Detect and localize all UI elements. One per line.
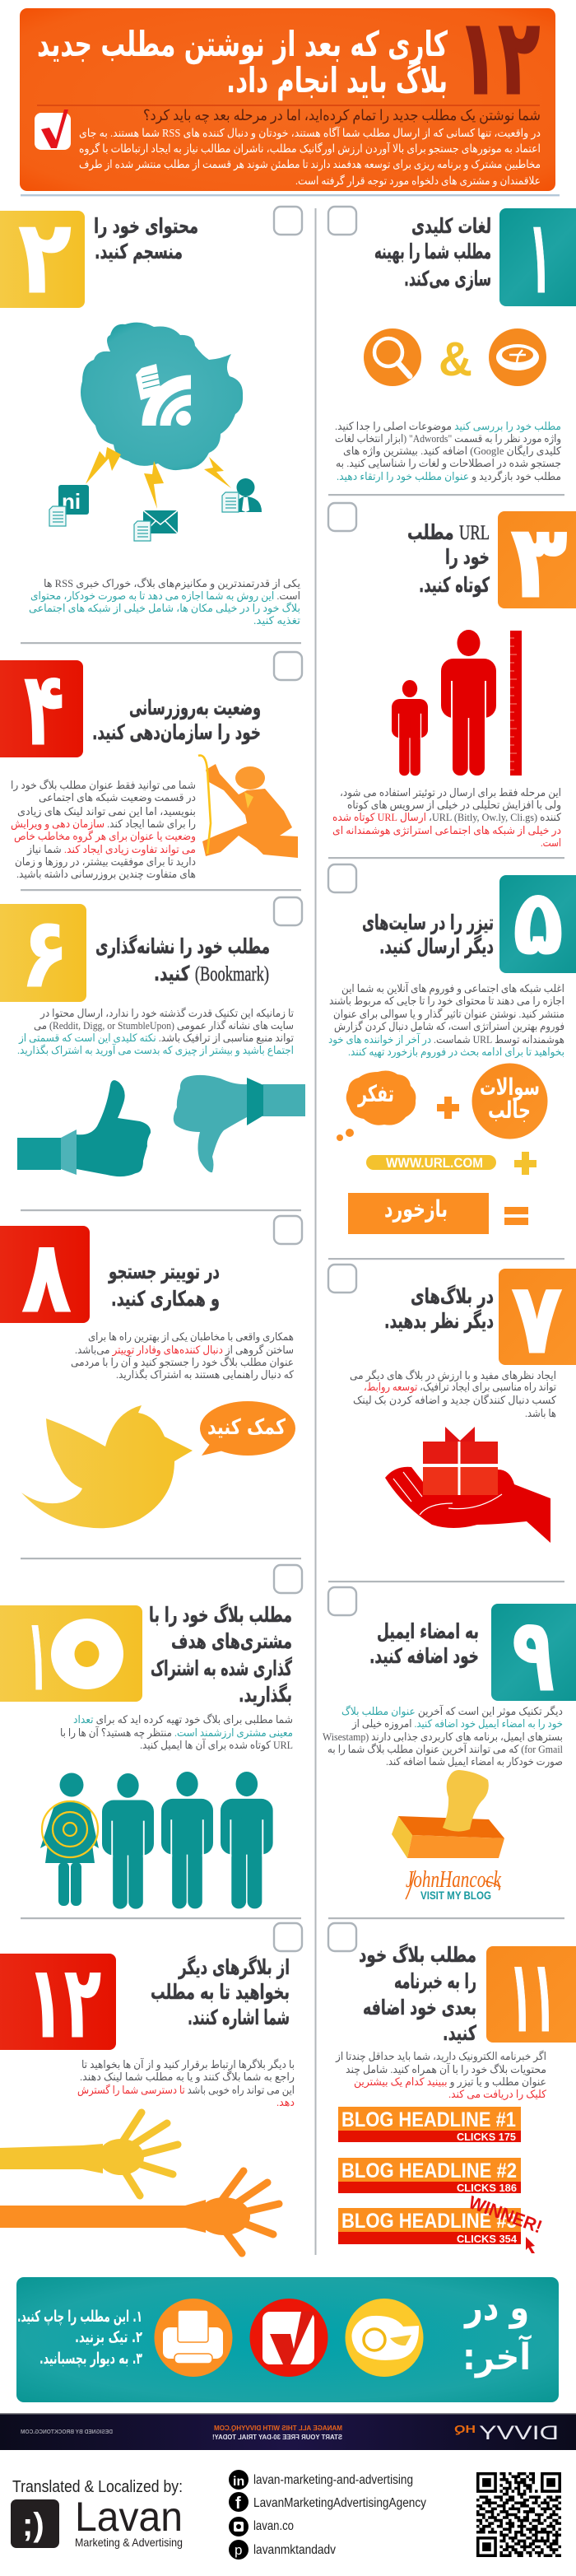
heading: بخواهید تا به مطلب <box>151 1980 290 2005</box>
facebook <box>229 2492 426 2513</box>
text block: هوشمندانه توسط URL شماست. در آخر از خواننده های خود <box>328 1032 564 1046</box>
checkbox <box>274 1565 302 1593</box>
text block: دیگر تکنیک موثر این است که آخرین عنوان مطلب بلاگ <box>341 1704 563 1718</box>
heading <box>369 1619 479 1669</box>
illustration: yellow hand <box>0 2113 178 2196</box>
text block: یکی از قدرتمندترین و مکانیزم‌های بلاگ، خوراک خبری RSS ها <box>44 576 300 590</box>
text block: بخواهید تا برای ادامه بحث در فوروم بازخورد تهیه کنند. <box>348 1046 564 1059</box>
pinterest: p <box>235 2542 242 2558</box>
text block <box>323 1704 563 1768</box>
text block: مطلب خود بازگردید و عنوان مطلب خود را ارتقاء دهید. <box>337 470 561 483</box>
badge: number 12: ۱۲ <box>27 1944 101 2061</box>
text block <box>11 778 196 881</box>
text block: کلیدی رایگان Google) اضافه کنید. بیشترین واژه های <box>343 445 562 458</box>
text block <box>332 786 562 849</box>
blog headline 3 winner: CLICKS 354 <box>457 2233 518 2245</box>
linkedin: lavan-marketing-and-advertising <box>253 2473 413 2487</box>
text block: است. <box>541 836 561 849</box>
heading <box>151 1955 290 2029</box>
illustration: gift in hand <box>385 1427 550 1543</box>
text block: مطلب خود را بررسی کنید موضوعات اصلی را جدا کنید. <box>335 420 561 433</box>
heading: مطلب بلاگ خود <box>359 1943 476 1968</box>
panel: step 1 keywords <box>328 198 576 483</box>
illustration: stamp <box>392 1770 504 1858</box>
badge: number 2: ۲ <box>18 198 72 317</box>
checkbox <box>274 897 302 925</box>
heading: وضعیت به‌روزرسانی <box>129 696 261 720</box>
text block: دهد. <box>276 2096 295 2108</box>
illustration: feedback equation: سوالات <box>480 1074 540 1101</box>
text block: راجع به شما بلاگ کنند و یا به مطلب شما لینک دهند. <box>80 2070 295 2084</box>
speech bubble <box>200 1401 295 1456</box>
heading: خود اضافه کنید. <box>369 1644 479 1669</box>
footer: social links <box>229 2470 426 2560</box>
intro paragraph: علاقمندان و مشتری های دلخواه مورد توجه قرار گرفته است. <box>295 174 541 188</box>
footer: qr code <box>476 2474 561 2555</box>
heading: and finally: آخر: <box>462 2334 532 2378</box>
badge: number 8: ۸ <box>21 1218 72 1335</box>
footer bar: mirrored divvyhq banner <box>0 2413 576 2450</box>
heading: (Bookmark) کنید. <box>154 962 269 985</box>
heading <box>407 520 490 598</box>
checkbox <box>274 1923 302 1951</box>
text block: شما مطلبی برای بلاگ خود تهیه کرده اید که برای تعداد <box>73 1712 293 1726</box>
panel: step 2 syndicate content <box>0 198 302 627</box>
footer bar: mirrored divvyhq banner: MANAGE ALL THIS WITH DIVVYHQ.COM <box>214 2425 342 2432</box>
icon: tape <box>346 2299 423 2377</box>
header panel <box>20 0 555 191</box>
logo: john hancock visit my blog: JohnHancock <box>406 1867 501 1893</box>
blog headline 3 winner: WINNER! <box>466 2192 545 2238</box>
intro paragraph: در واقعیت، تنها کسانی که از ارسال مطلب شما آگاه هستند، خودتان و دنبال کننده های RSS شما هستند. به جای <box>79 126 541 140</box>
panel: step 3 shorten url <box>328 503 576 849</box>
text block: دارید تا برای موفقیت بیشتر، در روزها و زمان <box>15 855 196 869</box>
text block: در خیلی از شبکه های اجتماعی استراتژی هوشمندانه ای <box>332 824 561 837</box>
heading <box>95 934 270 985</box>
text block: سایت های نشانه گذار عمومی (Reddit, Digg, or StumbleUpon) می <box>34 1019 294 1032</box>
text block: URL کوتاه شده برای آن ها ایمیل کنید. <box>140 1738 293 1752</box>
heading: شما اشاره کنند. <box>188 2005 290 2029</box>
badge: number 4 <box>0 650 83 769</box>
intro question: شما نوشتن یک مطلب جدید را تمام کرده‌اید، اما در مرحله بعد چه باید کرد؟ <box>143 107 541 124</box>
heading: and finally: و در <box>463 2287 529 2329</box>
panel: step 6 bookmark <box>0 896 305 1176</box>
illustration: feedback equation: بازخورد <box>384 1195 448 1223</box>
footer bar: mirrored divvyhq banner: DESIGNED BY BROCKTONCG.COM <box>21 2429 113 2435</box>
text block: شما می توانید فقط عنوان مطلب بلاگ خود را <box>11 778 196 792</box>
text block: بلاگ خود را در خیلی مکان ها، شامل خیلی از شبکه های اجتماعی <box>29 601 300 615</box>
heading <box>362 911 494 959</box>
main title: بلاگ باید انجام داد. <box>226 60 448 101</box>
text block: تا زمانیکه این تکنیک قدرت گذشته خود را ندارد، ارسال محتوا در <box>39 1007 294 1020</box>
text block: کسب دنبال کنندگان جدید و اضافه کردن بک لینک <box>353 1394 557 1407</box>
badge: number 9: ۹ <box>512 1596 555 1715</box>
heading: از بلاگرهای دیگر <box>178 1955 290 1980</box>
logo: john hancock visit my blog: VISIT MY BLOG <box>420 1889 491 1902</box>
heading: دیگر ارسال کنید. <box>379 934 494 959</box>
text block <box>60 1712 293 1752</box>
heading: منسجم کنید. <box>95 240 183 263</box>
footer bar: mirrored divvyhq banner: HQ <box>454 2423 476 2435</box>
illustration: feedback equation: WWW.URL.COM <box>386 1155 483 1171</box>
text block: جستجو شده در اصطلاحات و لغات را شناسایی کنید. به <box>336 457 561 470</box>
heading <box>374 214 491 291</box>
panel: step 9 email signature <box>323 1587 576 1902</box>
footer bar: mirrored divvyhq banner: DIVVY <box>479 2422 559 2444</box>
footer: lavan logo block: Translated & Localized by: <box>12 2478 183 2496</box>
text block <box>335 2050 547 2101</box>
checkbox <box>274 1216 302 1244</box>
heading: مطلب شما را بهینه <box>374 240 491 264</box>
badge: number 7: ۷ <box>511 1262 563 1377</box>
heading: بعدی خود اضافه <box>363 1996 476 2020</box>
text block: کننده URL (Bitly, Ow.ly, Cli.gs)، ارسال URL کوتاه شده <box>332 811 562 824</box>
checklist text: ۱. این مطلب را چاپ کنید. <box>17 2308 142 2326</box>
heading: بگذارید. <box>239 1683 292 1707</box>
heading: لغات کلیدی <box>411 214 491 238</box>
text block: تواند راه مناسبی برای ایجاد ترافیک، توسعه روابط، <box>364 1381 556 1394</box>
panel: step 7 comment on blogs <box>328 1262 576 1543</box>
blog headline 2: BLOG HEADLINE #2 <box>341 2159 517 2182</box>
text block: اجتماع باشید و بیشتر از چیزی که بدست می آورید به اشتراک بگذارید. <box>17 1043 294 1057</box>
text block <box>29 576 300 627</box>
illustration: thumbs up and down <box>17 1075 305 1176</box>
text block: که دنبال راهنمایی هستند به اشتراک بگذارید. <box>116 1368 295 1381</box>
illustration: feedback equation: جالب <box>488 1097 531 1124</box>
illustration: feedback equation <box>337 1064 548 1234</box>
badge: number 5: ۵ <box>513 869 564 975</box>
heading: مشتری‌های هدف <box>171 1629 292 1654</box>
text block <box>328 981 564 1059</box>
text block: محتویات بلاگ خود را با آن همراه کنید. شامل چند <box>346 2062 546 2076</box>
instagram: lavan.co <box>253 2519 294 2533</box>
icon: ampersand: & <box>439 333 472 386</box>
heading: گذاری شده به اشتراک <box>151 1656 292 1681</box>
heading: مطلب بلاگ خود را با <box>149 1603 292 1628</box>
checkbox <box>328 864 356 892</box>
heading: URL مطلب <box>407 520 490 544</box>
text block: های متفاوت چندین بروزرسانی داشته باشید. <box>16 868 196 881</box>
icon: header checkmark <box>35 109 71 150</box>
text block: تواند منبع مناسبی از ترافیک باشد. نکته کلیدی این است که قسمتی از <box>18 1032 294 1045</box>
badge: number 10 <box>0 1596 142 1713</box>
text block: وضعیت یا عنوان برای هر گروه مخاطب خاص <box>14 830 196 843</box>
checkbox <box>328 1923 356 1951</box>
heading <box>359 1943 476 2045</box>
blog headline 3 winner: BLOG HEADLINE #3 <box>341 2210 517 2233</box>
badge: number 1 <box>499 198 576 317</box>
text block: کلیک را دریافت می کند. <box>448 2088 547 2101</box>
badge: number 10: ۰ <box>51 1596 123 1713</box>
panel: step 11 newsletter <box>328 1923 576 2253</box>
text block: است. این روش به شما اجازه می دهد تا به صورت خودکار، محتوای <box>30 589 300 603</box>
illustration: orange hand <box>0 2171 279 2253</box>
panel: step 5 submit teaser <box>328 864 576 1234</box>
blog headline 2 <box>338 2158 521 2194</box>
icon: steak <box>489 328 546 386</box>
text block: for Gmail) که می توانند آخرین عنوان مطلب بلاگ شما را به <box>327 1742 563 1756</box>
text block: بسترهای ایمیل، برنامه های کاربردی جذابی دارند (Wisestamp <box>323 1731 563 1744</box>
text block: با دیگر بلاگرها ارتباط برقرار کنید و از آن ها بخواهید تا <box>81 2057 295 2071</box>
badge: number 6 <box>0 896 86 1009</box>
checkbox <box>274 652 302 680</box>
text block: اگر خبرنامه الکترونیک دارید، شما باید حداقل چندتا از <box>335 2050 546 2063</box>
checklist text <box>17 2308 142 2368</box>
facebook: f <box>235 2494 241 2513</box>
heading: محتوای خود را <box>94 214 198 239</box>
illustration: man measuring <box>198 756 298 858</box>
footer: lavan logo block: ;) <box>22 2507 44 2543</box>
heading: خود را سازمان‌دهی کنید. <box>92 720 261 745</box>
heading: به امضاء ایمیل <box>377 1619 479 1643</box>
heading <box>384 1284 494 1334</box>
illustration: yellow bird <box>21 1405 193 1528</box>
panel: step 10 targeted customers <box>0 1565 302 1909</box>
checkbox <box>328 503 356 531</box>
heading <box>94 214 198 263</box>
heading: را به خبرنامه <box>394 1969 476 1994</box>
heading: سازی می‌کند. <box>404 267 491 291</box>
text block: عنوان مطلب بلاگ خود را جستجو کنید و آن را با مردمی <box>71 1355 294 1369</box>
checklist text: ۲. تیک بزنید. <box>75 2328 142 2346</box>
heading <box>108 1260 220 1311</box>
checkbox <box>328 207 356 235</box>
logo: john hancock visit my blog <box>406 1867 501 1902</box>
text block <box>71 1330 295 1381</box>
badge: number 12 <box>0 1944 116 2061</box>
text block: ساختن گروهی از دنبال کننده‌های وفادار توییتر می‌باشد. <box>75 1344 294 1357</box>
text block: را برای شما ایجاد کند. سازمان دهی و ویرایش <box>11 818 196 831</box>
icon: printer <box>155 2299 232 2377</box>
text block: خود را به امضاء ایمیل خود اضافه کنید. امروزه خیلی از <box>351 1717 563 1731</box>
text block: این مرحله فقط برای ارسال در توئیتر استفاده می شود، <box>340 786 561 799</box>
panel: and finally <box>16 2277 559 2402</box>
linkedin: in <box>233 2475 244 2489</box>
heading: مطلب خود را نشانه‌گذاری <box>95 934 270 959</box>
speech bubble: کمک کنید <box>207 1415 286 1440</box>
text block: تغذیه کنید. <box>253 614 300 627</box>
icon: magnifier <box>364 328 421 386</box>
heading: در بلاگ‌های <box>411 1284 494 1308</box>
badge: number 4: ۴ <box>24 650 64 769</box>
footer: lavan logo block: Lavan <box>75 2494 183 2540</box>
text block: ایجاد نظرهای مفید و با ارزش در بلاگ های دیگر می <box>350 1368 556 1382</box>
main title <box>37 24 448 101</box>
linkedin <box>229 2470 413 2490</box>
blog headline 1 <box>338 2107 521 2143</box>
text block: همکاری واقعی با مخاطبان یکی از بهترین راه ها برای <box>88 1330 294 1344</box>
heading: در توییتر جستجو <box>108 1260 220 1284</box>
text block <box>350 1368 557 1419</box>
text block <box>17 1007 294 1057</box>
illustration: target audience people <box>40 1772 273 1909</box>
illustration: feedback equation: تفکر <box>357 1080 394 1107</box>
blog headline 1: CLICKS 175 <box>457 2131 516 2143</box>
footer bar: mirrored divvyhq banner: START YOUR FREE 30-DAY TRIAL TODAY! <box>212 2434 342 2441</box>
text block: این می تواند راه خوبی باشد تا دسترسی شما را گسترش <box>77 2084 295 2097</box>
intro paragraph: اعتماد به موتورهای جستجو برای بالا آوردن ارزش اورگانیک مطلب، ناشران مطالب نیاز به ایجاد ارتباطات با گروه <box>79 142 541 156</box>
text block: بنویسید، اما این نمی تواند لینک های زیادی <box>17 805 196 818</box>
intro paragraph <box>79 126 541 188</box>
checklist text: ۳. به دیوار بچسبانید. <box>39 2350 142 2368</box>
panel: step 4 status updates <box>0 650 302 881</box>
illustration: rss cloud network <box>49 323 262 541</box>
badge: number 3: ۳ <box>510 503 568 622</box>
text block: معینی مشتری ارزشمند است. منتظر چه هستید؟ آن ها را با <box>60 1726 293 1740</box>
icon: checkmark <box>250 2299 327 2377</box>
panel: step 12 ask bloggers <box>0 1923 302 2253</box>
heading <box>149 1603 292 1707</box>
heading: and finally <box>462 2287 532 2378</box>
checkbox <box>274 207 302 235</box>
pinterest: lavanmktandadv <box>253 2543 336 2557</box>
text block: در قسمت وضعیت شبکه های اجتماعی <box>39 791 196 804</box>
illustration: tall and short people with ruler <box>392 630 522 776</box>
badge: number 6: ۶ <box>21 896 69 1009</box>
footer: lavan logo block: Marketing & Advertising <box>75 2536 183 2549</box>
text block: واژه مورد نظر را به قسمت "Adwords" (ابزار انتخاب لغات <box>335 432 561 445</box>
text block <box>335 420 562 483</box>
checkbox <box>328 1587 356 1615</box>
blog headline 3 winner <box>338 2192 545 2253</box>
checkbox <box>328 1265 356 1293</box>
blog headline 2: CLICKS 186 <box>457 2182 517 2194</box>
illustration: rss cloud network: ni <box>62 489 81 514</box>
footer: lavan logo block <box>11 2478 183 2549</box>
blog headline 1: BLOG HEADLINE #1 <box>341 2108 516 2131</box>
text block: می تواند تفاوت زیادی ایجاد کند. شما نیاز <box>26 843 196 856</box>
text block: عنوان مطلب و یا تیزر و ببینید کدام یک بیشترین <box>354 2075 546 2089</box>
heading: تیزر را در سایت‌های <box>362 911 494 935</box>
panel: step 8 twitter <box>0 1216 302 1528</box>
pinterest <box>229 2540 336 2560</box>
instagram <box>229 2517 294 2536</box>
heading <box>92 696 261 745</box>
facebook: LavanMarketingAdvertisingAgency <box>253 2496 426 2510</box>
heading: کوتاه کنید. <box>419 573 490 598</box>
heading: دیگر نظر بدهید. <box>384 1309 494 1334</box>
badge: number 8 <box>0 1218 90 1335</box>
heading: کنید. <box>443 2021 476 2045</box>
text block: ولی با افزایش تحلیلی در خیلی از سرویس های کوتاه <box>347 799 561 812</box>
text block: ها باشد. <box>525 1407 556 1419</box>
badge: number 10: ۱ <box>27 1596 48 1713</box>
heading: و همکاری کنید. <box>111 1287 220 1311</box>
heading: خود را <box>445 545 490 570</box>
text block <box>77 2057 295 2108</box>
